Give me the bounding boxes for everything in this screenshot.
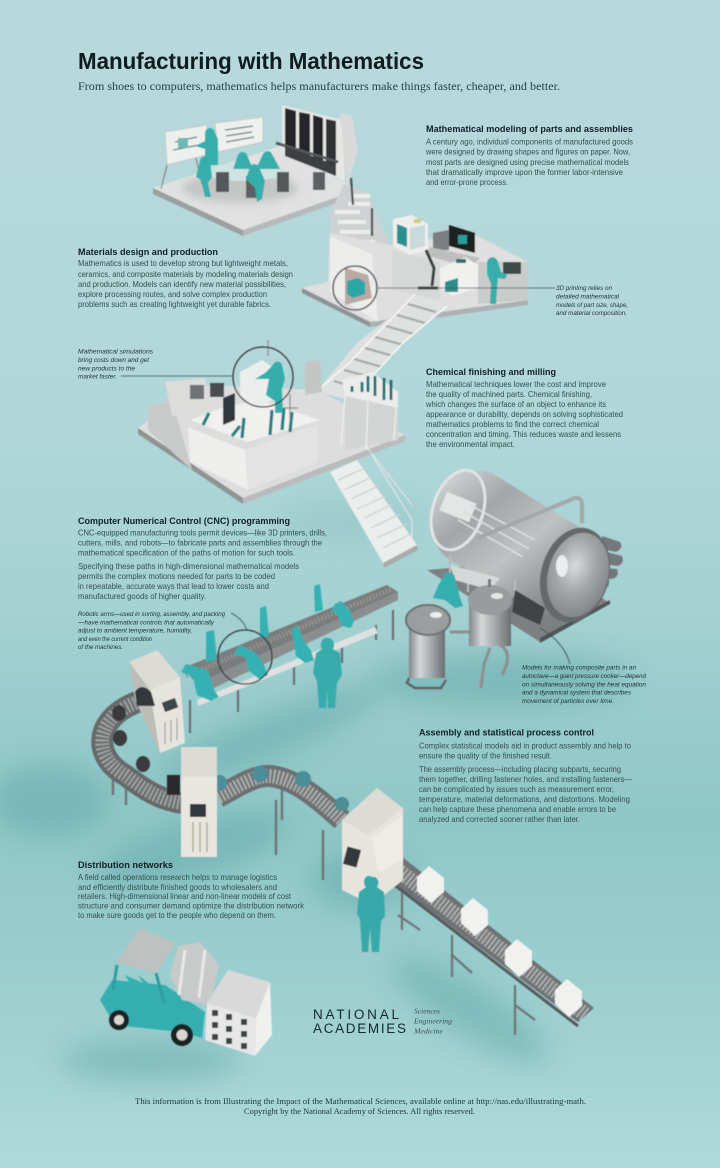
note: simulations: Mathematical simulations xyxy=(78,348,154,356)
footer credit: This information is from Illustrating the Impact of the Mathematical Sciences, available online at http://nas.edu/illustrating-math. xyxy=(135,1096,586,1106)
text block: modeling: most parts are designed using precise mathematical models xyxy=(426,157,629,167)
illustration: simulation room xyxy=(121,340,405,504)
text block: distribution: and efficiently distribute finished goods to wholesalers and xyxy=(78,882,277,892)
text block: chemical: mathematics problems to find the correct chemical xyxy=(426,419,599,429)
text block: assembly: analyzed and corrected sooner rather than later. xyxy=(419,814,580,824)
operator xyxy=(313,638,342,708)
offices and counters xyxy=(148,378,320,490)
note: 3D printing: and material composition. xyxy=(556,310,627,317)
text block: distribution: to make sure goods get to the people who depend on them. xyxy=(78,910,276,920)
subtitle: From shoes to computers, mathematics helps manufacturers make things faster, cheaper, and better. xyxy=(78,79,560,93)
logo: National Academies xyxy=(313,1006,452,1036)
note: autoclave xyxy=(522,664,646,705)
boxes xyxy=(417,866,582,1017)
text block: CNC: permits the complex motions needed for parts to be coded xyxy=(78,571,275,581)
note: autoclave: on simultaneously solving the heat equation xyxy=(522,682,646,688)
text block: modeling: Mathematical modeling of parts and assemblies xyxy=(426,124,633,135)
text block: chemical: the environmental impact. xyxy=(426,439,515,449)
callout circle simulation xyxy=(121,340,322,413)
logo: National Academies: NATIONAL xyxy=(313,1007,399,1022)
text block: CNC: Specifying these paths in high-dimensional mathematical models xyxy=(78,561,299,571)
note: autoclave: and a dynamical system that describes xyxy=(522,690,632,696)
text block: CNC: manufactured goods of higher quality. xyxy=(78,591,206,601)
text block: distribution: Distribution networks xyxy=(78,860,173,871)
note: 3D printing xyxy=(556,285,628,317)
teal operator xyxy=(433,572,463,608)
machine one xyxy=(129,650,185,753)
illustration: modeling room xyxy=(153,105,358,236)
illustration: final conveyor xyxy=(342,788,594,1035)
text block: CNC: CNC-equipped manufacturing tools permit devices—like 3D printers, drills, xyxy=(78,528,327,538)
text block: modeling: that dramatically improve upon the former labor-intensive xyxy=(426,167,623,177)
text block: CNC xyxy=(78,516,327,601)
left tank xyxy=(406,605,450,688)
note: 3D printing: models of part size, shape, xyxy=(556,302,628,309)
text block: CNC: in repeatable, accurate ways that lead to lower costs and xyxy=(78,581,269,591)
note: autoclave: Models for making composite parts in an xyxy=(522,664,636,672)
note: robotic arms xyxy=(77,611,225,651)
shelf with bottles xyxy=(341,372,398,450)
illustration: autoclave xyxy=(406,463,623,688)
text block: CNC: Computer Numerical Control (CNC) programming xyxy=(78,516,290,527)
illustration: forklift xyxy=(100,928,272,1056)
text block: assembly: The assembly process—including placing subparts, securing xyxy=(419,764,621,774)
text block: assembly: can help capture these phenomena and enable errors to be xyxy=(419,804,616,814)
text block: modeling: were designed by drawing shapes and figures on paper. Now, xyxy=(425,147,630,157)
floor shadows xyxy=(0,500,630,1082)
3D printer xyxy=(393,215,428,255)
text block: assembly: Complex statistical models aid in product assembly and help to xyxy=(419,741,631,751)
front dome xyxy=(530,520,623,630)
text block: chemical: Mathematical techniques lower the cost and improve xyxy=(426,379,606,389)
text block: materials: Materials design and production xyxy=(78,247,218,258)
machine three xyxy=(342,788,403,905)
text block: CNC: mathematical specification of the paths of motion for such tools. xyxy=(78,548,295,558)
text block: CNC: cutters, mills, and robots—to fabricate parts and assemblies through the xyxy=(78,538,322,548)
whiteboards xyxy=(161,117,263,189)
middle tank xyxy=(450,579,512,688)
operator xyxy=(357,876,385,952)
note: robotic arms: adjust to ambient temperature, humidity, xyxy=(78,628,192,634)
logo: National Academies: ACADEMIES xyxy=(313,1021,406,1036)
text block: assembly: can be complicated by issues such as measurement error, xyxy=(419,784,614,794)
note: simulations xyxy=(78,348,154,380)
illustration: stairs one xyxy=(330,178,392,252)
text block: distribution: retailers. High-dimensional linear and non-linear models of cost xyxy=(78,891,292,901)
text block: modeling: and error-prone process. xyxy=(426,177,508,187)
server cabinets xyxy=(276,105,358,188)
text block: materials xyxy=(78,247,293,309)
products xyxy=(112,705,349,811)
text block: chemical: concentration and timing. This reduces waste and lessens xyxy=(426,429,621,439)
text block: chemical xyxy=(425,367,623,449)
note: 3D printing: 3D printing relies on xyxy=(556,285,612,292)
illustration: stairs two xyxy=(316,294,447,400)
base plate xyxy=(427,560,610,642)
text block: assembly xyxy=(419,728,633,824)
illustration: robot conveyor xyxy=(181,584,398,733)
vessel body xyxy=(432,470,600,618)
logo: National Academies: Sciences xyxy=(414,1006,440,1016)
note: simulations: market faster. xyxy=(78,374,117,380)
note: robotic arms: and even the current condition xyxy=(78,636,152,643)
illustration: winding conveyor xyxy=(102,650,349,880)
text block: materials: explore processing routes, and solve complex production xyxy=(78,289,267,299)
logo: National Academies: Medicine xyxy=(413,1026,444,1036)
note: simulations: bring costs down and get xyxy=(78,357,149,364)
technician xyxy=(487,257,507,304)
note: autoclave: movement of particles over time. xyxy=(522,698,614,705)
logo: National Academies: Engineering xyxy=(413,1016,452,1026)
people xyxy=(195,128,280,202)
footer credit: Copyright by the National Academy of Sciences. All rights reserved. xyxy=(244,1106,475,1116)
text block: materials: problems such as creating lightweight yet durable fabrics. xyxy=(78,299,271,309)
footer credit xyxy=(135,1096,586,1116)
text block: assembly: them together, drilling fastener holes, and installing fasteners— xyxy=(419,774,633,784)
robot arms xyxy=(181,584,354,701)
text block: assembly: temperature, material deformations, and distortions. Modeling xyxy=(419,794,630,804)
machine two xyxy=(181,747,217,857)
text block: assembly: ensure the quality of the finished result. xyxy=(419,751,552,761)
callout circle 3D printing xyxy=(333,266,555,310)
text block: chemical: the quality of machined parts. Chemical finishing, xyxy=(426,389,592,399)
text block: materials: and production. Models can identify new material possibilities, xyxy=(78,279,286,289)
text block: distribution xyxy=(78,860,305,920)
note: robotic arms: Robotic arms—used in sorting, assembly, and packing xyxy=(78,611,225,618)
illustration: 3D printing room xyxy=(302,215,555,327)
text block: chemical: which changes the surface of an object to enhance its xyxy=(425,399,606,409)
text block: distribution: A field called operations research helps to manage logistics xyxy=(78,872,277,882)
text block: materials: Mathematics is used to develop strong but lightweight metals, xyxy=(78,258,288,268)
text block: materials: ceramics, and composite materials by modeling materials design xyxy=(78,269,293,279)
note: autoclave: autoclave—a giant pressure cooker—depend xyxy=(522,673,646,680)
text block: modeling xyxy=(425,124,633,187)
note: simulations: new products to the xyxy=(78,366,135,372)
callout circle robots xyxy=(218,613,272,684)
text block: assembly: Assembly and statistical process control xyxy=(419,728,594,738)
monitor and desk xyxy=(418,225,480,288)
text block: modeling: A century ago, individual components of manufactured goods xyxy=(426,137,633,147)
table and chairs xyxy=(205,163,325,198)
note: 3D printing: detailed mathematical xyxy=(556,294,620,300)
printer two xyxy=(440,257,478,296)
title: Manufacturing with Mathematics xyxy=(78,48,424,74)
text block: chemical: Chemical finishing and milling xyxy=(426,367,556,378)
note: robotic arms: —have mathematical controls that automatically xyxy=(77,620,215,626)
illustration: stairs three xyxy=(330,445,418,568)
note: robotic arms: of the machines. xyxy=(78,644,123,651)
text block: chemical: appearance or durability, depends on solving sophisticated xyxy=(426,409,623,419)
text block: distribution: structure and consumer demand optimize the distribution network xyxy=(78,901,305,911)
